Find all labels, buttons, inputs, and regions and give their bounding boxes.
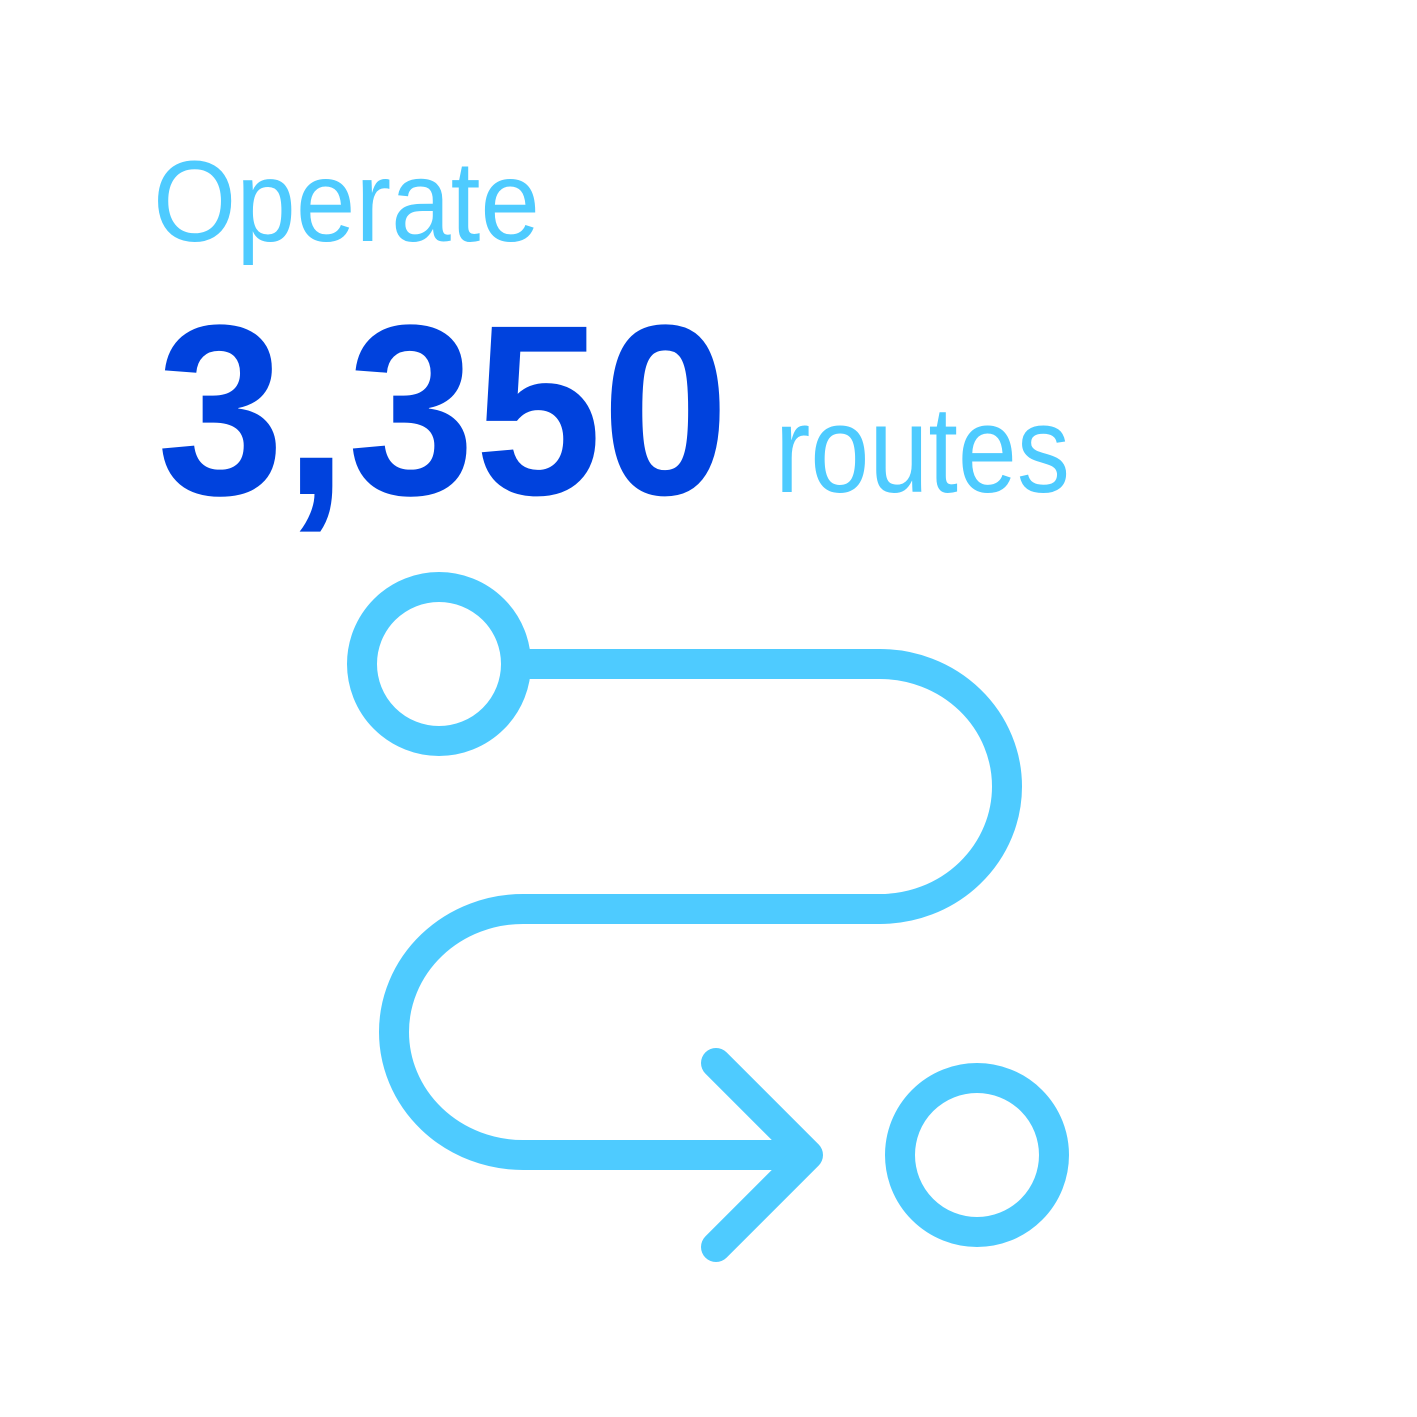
number: 3,350: 3,350 — [157, 275, 729, 546]
heading: Operate: Operate — [153, 138, 540, 266]
unit: routes: routes — [775, 382, 1070, 519]
icon: route path — [362, 587, 1054, 1247]
